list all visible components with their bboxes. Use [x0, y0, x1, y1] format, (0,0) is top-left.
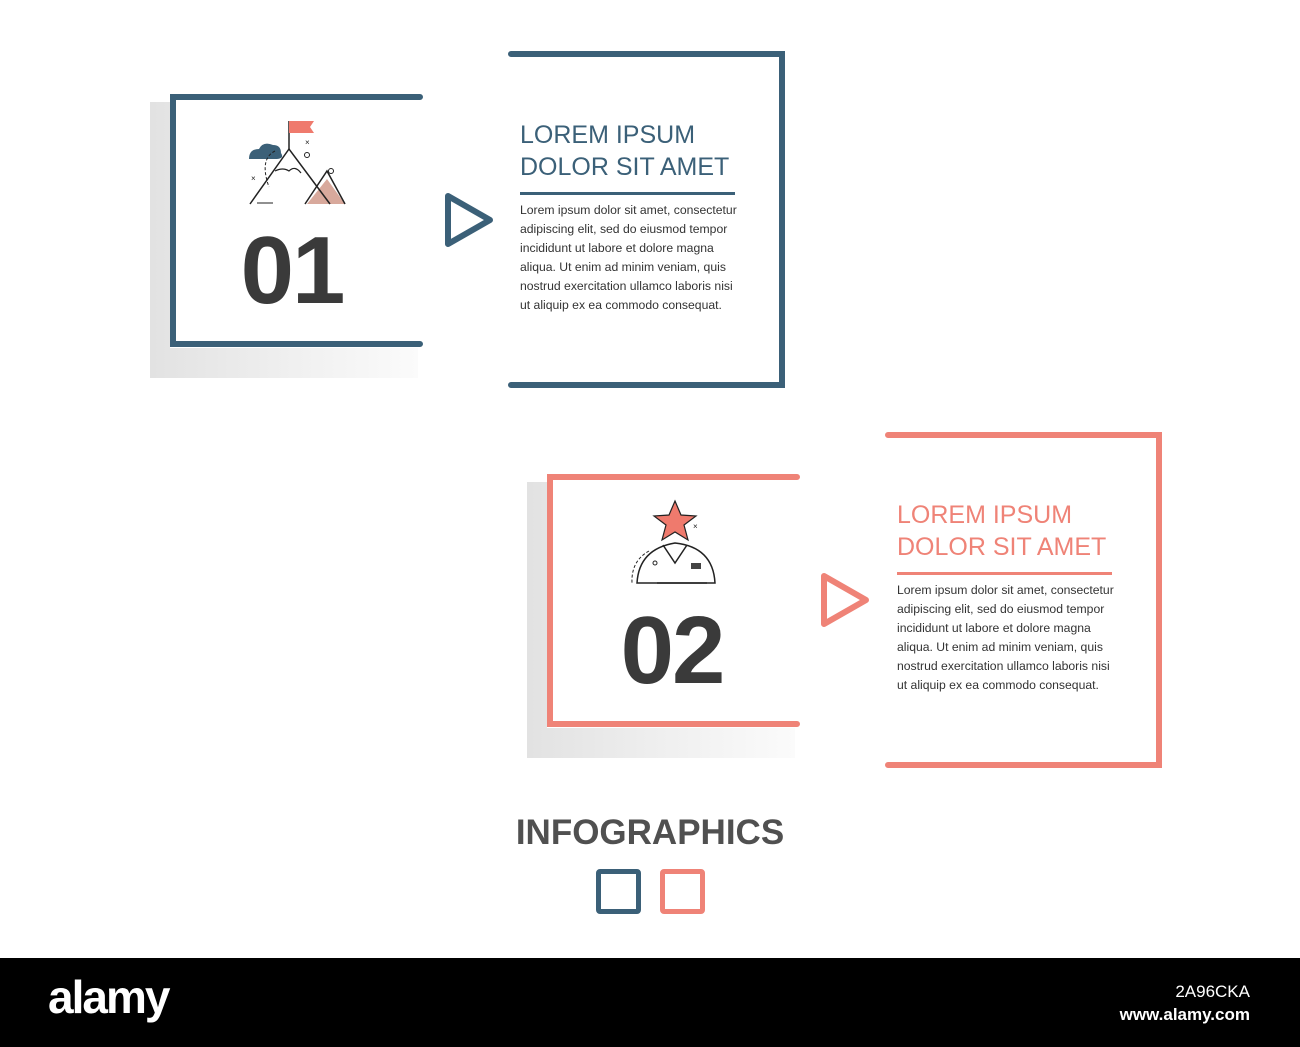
frame — [885, 432, 1162, 768]
number 01: 01 — [241, 217, 343, 324]
heading: LOREM IPSUM — [520, 121, 695, 149]
footer bar — [0, 958, 1300, 1047]
panel: box 1 — [170, 94, 424, 348]
icon: mountain with flag: × — [305, 138, 310, 147]
icon: mountain with flag: × — [251, 174, 256, 183]
frame — [508, 51, 785, 388]
panel: text 1 — [508, 51, 785, 388]
body text: ut aliquip ex ea commodo consequat. — [897, 678, 1099, 692]
body text: Lorem ipsum dolor sit amet, consectetur — [897, 583, 1114, 597]
panel: box 2 — [547, 474, 801, 728]
body text: ut aliquip ex ea commodo consequat. — [520, 298, 722, 312]
heading — [897, 501, 1106, 561]
heading: DOLOR SIT AMET — [520, 153, 729, 181]
icon: person with star: × — [693, 522, 698, 531]
body text: incididunt ut labore et dolore magna — [520, 241, 714, 255]
heading: DOLOR SIT AMET — [897, 533, 1106, 561]
shadow: box 1 — [150, 102, 418, 378]
icon: mountain with flag — [249, 121, 346, 204]
image id — [1120, 982, 1250, 1024]
panel: text 2 — [885, 432, 1162, 768]
title: INFOGRAPHICS: INFOGRAPHICS — [516, 813, 784, 852]
icon: person with star — [631, 500, 716, 584]
body text: nostrud exercitation ullamco laboris nisi — [897, 659, 1110, 673]
heading: LOREM IPSUM — [897, 501, 1072, 529]
arrow 1 — [445, 193, 493, 247]
body text: adipiscing elit, sed do eiusmod tempor — [897, 602, 1104, 616]
logo: alamy — [48, 971, 168, 1023]
body text: aliqua. Ut enim ad minim veniam, quis — [897, 640, 1103, 654]
frame — [547, 474, 800, 727]
image id: www.alamy.com — [1120, 1005, 1250, 1024]
body text: incididunt ut labore et dolore magna — [897, 621, 1091, 635]
body text — [897, 583, 1114, 692]
frame — [170, 94, 423, 347]
arrow 2 — [821, 573, 869, 627]
legend squares — [596, 869, 705, 914]
heading — [520, 121, 729, 181]
body text — [520, 203, 737, 312]
shadow: box 2 — [527, 482, 795, 758]
body text: nostrud exercitation ullamco laboris nisi — [520, 279, 733, 293]
image id: 2A96CKA — [1175, 982, 1250, 1001]
body text: Lorem ipsum dolor sit amet, consectetur — [520, 203, 737, 217]
body text: aliqua. Ut enim ad minim veniam, quis — [520, 260, 726, 274]
number 02: 02 — [621, 597, 723, 704]
body text: adipiscing elit, sed do eiusmod tempor — [520, 222, 727, 236]
